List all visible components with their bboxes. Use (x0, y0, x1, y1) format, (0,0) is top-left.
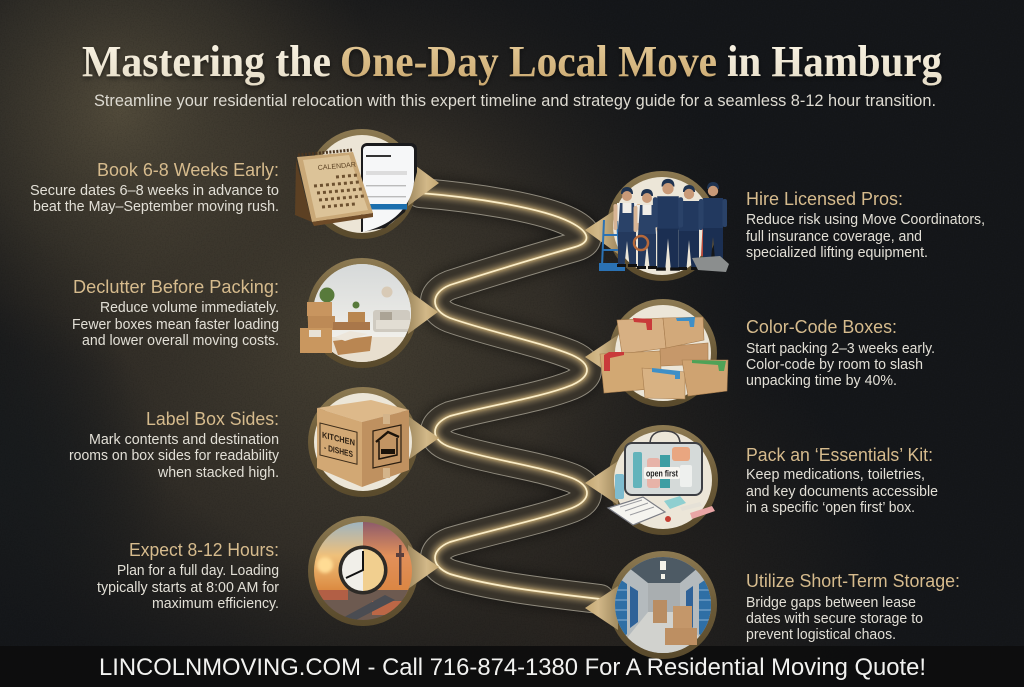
text block: Expect 8-12 Hours: Plan for a full day. Loading (117, 563, 279, 579)
text block: Hire Licensed Pros: Hire Licensed Pros: (746, 188, 903, 209)
text block: Book 6-8 Weeks Early: Book 6-8 Weeks Early: (97, 159, 279, 180)
text block: Pack an Essentials Kit: and key documents accessible (746, 484, 938, 500)
icon: house and bed (373, 425, 401, 468)
text block: Utilize Short-Term Storage: dates with secure storage to (746, 611, 923, 627)
title: in Hamburg (727, 37, 942, 86)
icon: clock (338, 546, 388, 594)
text block: Hire Licensed Pros: Reduce risk using Move Coordinators, (746, 212, 985, 228)
text block: Utilize Short-Term Storage: prevent logistical chaos. (746, 627, 896, 643)
icon: desk calendar (295, 150, 373, 226)
text block: Utilize Short-Term Storage (746, 570, 960, 643)
text block: Hire Licensed Pros: specialized lifting equipment. (746, 245, 928, 261)
icon: documents (608, 497, 665, 525)
text block: Utilize Short-Term Storage: Utilize Short-Term Storage: (746, 570, 960, 591)
icon: medicine bottle (615, 474, 624, 499)
icon: booking phone (361, 143, 417, 232)
text block: Utilize Short-Term Storage: Bridge gaps between lease (746, 595, 916, 611)
text block: Hire Licensed Pros: full insurance coverage, and (746, 229, 922, 245)
icon: desk calendar: CALENDAR (318, 162, 356, 172)
step 1 image: calendar and phone (295, 129, 439, 239)
text block: Label Box Sides: when stacked high. (157, 465, 279, 481)
icon: stacked boxes (300, 302, 372, 355)
step 3 image: decluttered room (300, 258, 438, 368)
text block: Label Box Sides: Label Box Sides: (146, 408, 279, 429)
text block: Hire Licensed Pros (746, 188, 985, 261)
text block: Declutter Before Packing: Reduce volume immediately. (100, 300, 279, 316)
step 5 image: labelled box (308, 387, 439, 497)
text block: Pack an Essentials Kit: Pack an ‘Essentials’ Kit: (746, 444, 933, 465)
open first tag: open first (646, 468, 678, 478)
movers (614, 179, 729, 272)
step 6 image: essentials kit (585, 425, 718, 535)
winding road timeline (420, 193, 600, 599)
text block: Color-Code Boxes: Start packing 2–3 weeks early. (746, 341, 935, 357)
icon: large cardboard box (317, 400, 409, 487)
icon: medicine packets (664, 496, 715, 522)
text block: Color-Code Boxes: Color-Code Boxes: (746, 316, 897, 337)
text block: Book 6-8 Weeks Early: beat the May–September moving rush. (33, 199, 279, 215)
title (82, 37, 942, 86)
text block: Color-Code Boxes (746, 316, 935, 389)
box label (320, 423, 357, 464)
text block: Declutter Before Packing: and lower overall moving costs. (82, 333, 279, 349)
step 2 image: moving crew (585, 171, 729, 281)
step 4 image: colour-coded boxes (585, 299, 728, 407)
coloured tape marks (604, 317, 726, 379)
box label: KITCHEN (322, 430, 355, 448)
icon: plant (320, 288, 360, 308)
text block: Book 6-8 Weeks Early: Secure dates 6–8 weeks in advance to (30, 183, 279, 199)
text block: Label Box Sides: rooms on box sides for readability (69, 448, 280, 464)
text block: Label Box Sides (69, 408, 280, 481)
text block: Pack an Essentials Kit (746, 444, 938, 516)
text block: Label Box Sides: Mark contents and destination (89, 432, 279, 448)
box label: - DISHES (324, 442, 353, 459)
text block: Color-Code Boxes: unpacking time by 40%. (746, 373, 897, 389)
icon: blue hand truck (600, 220, 624, 270)
footer call to action: LINCOLNMOVING.COM - Call 716-874-1380 For A Residential Moving Quote! (99, 654, 926, 681)
text block: Expect 8-12 Hours: Expect 8-12 Hours: (129, 539, 279, 560)
text block: Declutter Before Packing (72, 276, 279, 349)
text block: Book 6-8 Weeks Early (30, 159, 279, 215)
title: Mastering the (82, 37, 331, 86)
text block: Pack an Essentials Kit: Keep medications, toiletries, (746, 467, 925, 483)
text block: Expect 8-12 Hours: maximum efficiency. (152, 596, 279, 612)
text block: Expect 8-12 Hours (97, 539, 279, 612)
text block: Expect 8-12 Hours: typically starts at 8:00 AM for (97, 580, 279, 596)
step 8 image: storage corridor (585, 551, 717, 659)
text block: Declutter Before Packing: Declutter Before Packing: (73, 276, 279, 297)
text block: Declutter Before Packing: Fewer boxes mean faster loading (72, 317, 279, 333)
icon: red hand truck (702, 218, 716, 256)
icon: stored boxes (653, 600, 697, 645)
subtitle: Streamline your residential relocation with this expert timeline and strategy guide for a seamless 8-12 hour transition. (94, 92, 936, 110)
icon: cardboard boxes with coloured tape (600, 317, 728, 399)
text block: Pack an Essentials Kit: in a specific ‘open first’ box. (746, 500, 915, 516)
footer bar (0, 646, 1024, 687)
title: One-Day Local Move (340, 37, 717, 86)
text block: Color-Code Boxes: Color-code by room to slash (746, 357, 923, 373)
step 7 image: clock over Hamburg (308, 516, 439, 626)
